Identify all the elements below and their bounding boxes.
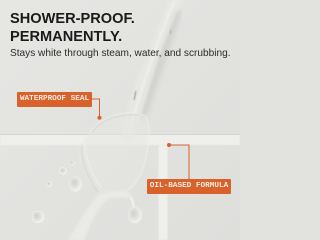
title: PERMANENTLY. — [10, 28, 122, 44]
horizontal grout — [0, 134, 240, 145]
background: tile wall with water splash — [0, 0, 240, 240]
callout: oil-based formula — [147, 179, 231, 194]
subtitle: Stays white through steam, water, and scrubbing. — [10, 48, 230, 58]
callout: oil-based formula: OIL-BASED FORMULA — [150, 182, 228, 190]
connector: waterproof seal — [92, 98, 102, 120]
callout: waterproof seal — [17, 92, 92, 106]
water stream — [122, 0, 184, 141]
splash pool — [78, 113, 149, 195]
droplets — [128, 207, 142, 223]
callout: waterproof seal: WATERPROOF SEAL — [20, 95, 89, 103]
vertical grout — [158, 145, 168, 240]
water stream shadow — [142, 10, 178, 118]
lower run-off — [68, 191, 131, 240]
title: SHOWER-PROOF. — [10, 10, 135, 26]
title — [10, 10, 135, 44]
connector: oil-based formula — [167, 143, 190, 179]
